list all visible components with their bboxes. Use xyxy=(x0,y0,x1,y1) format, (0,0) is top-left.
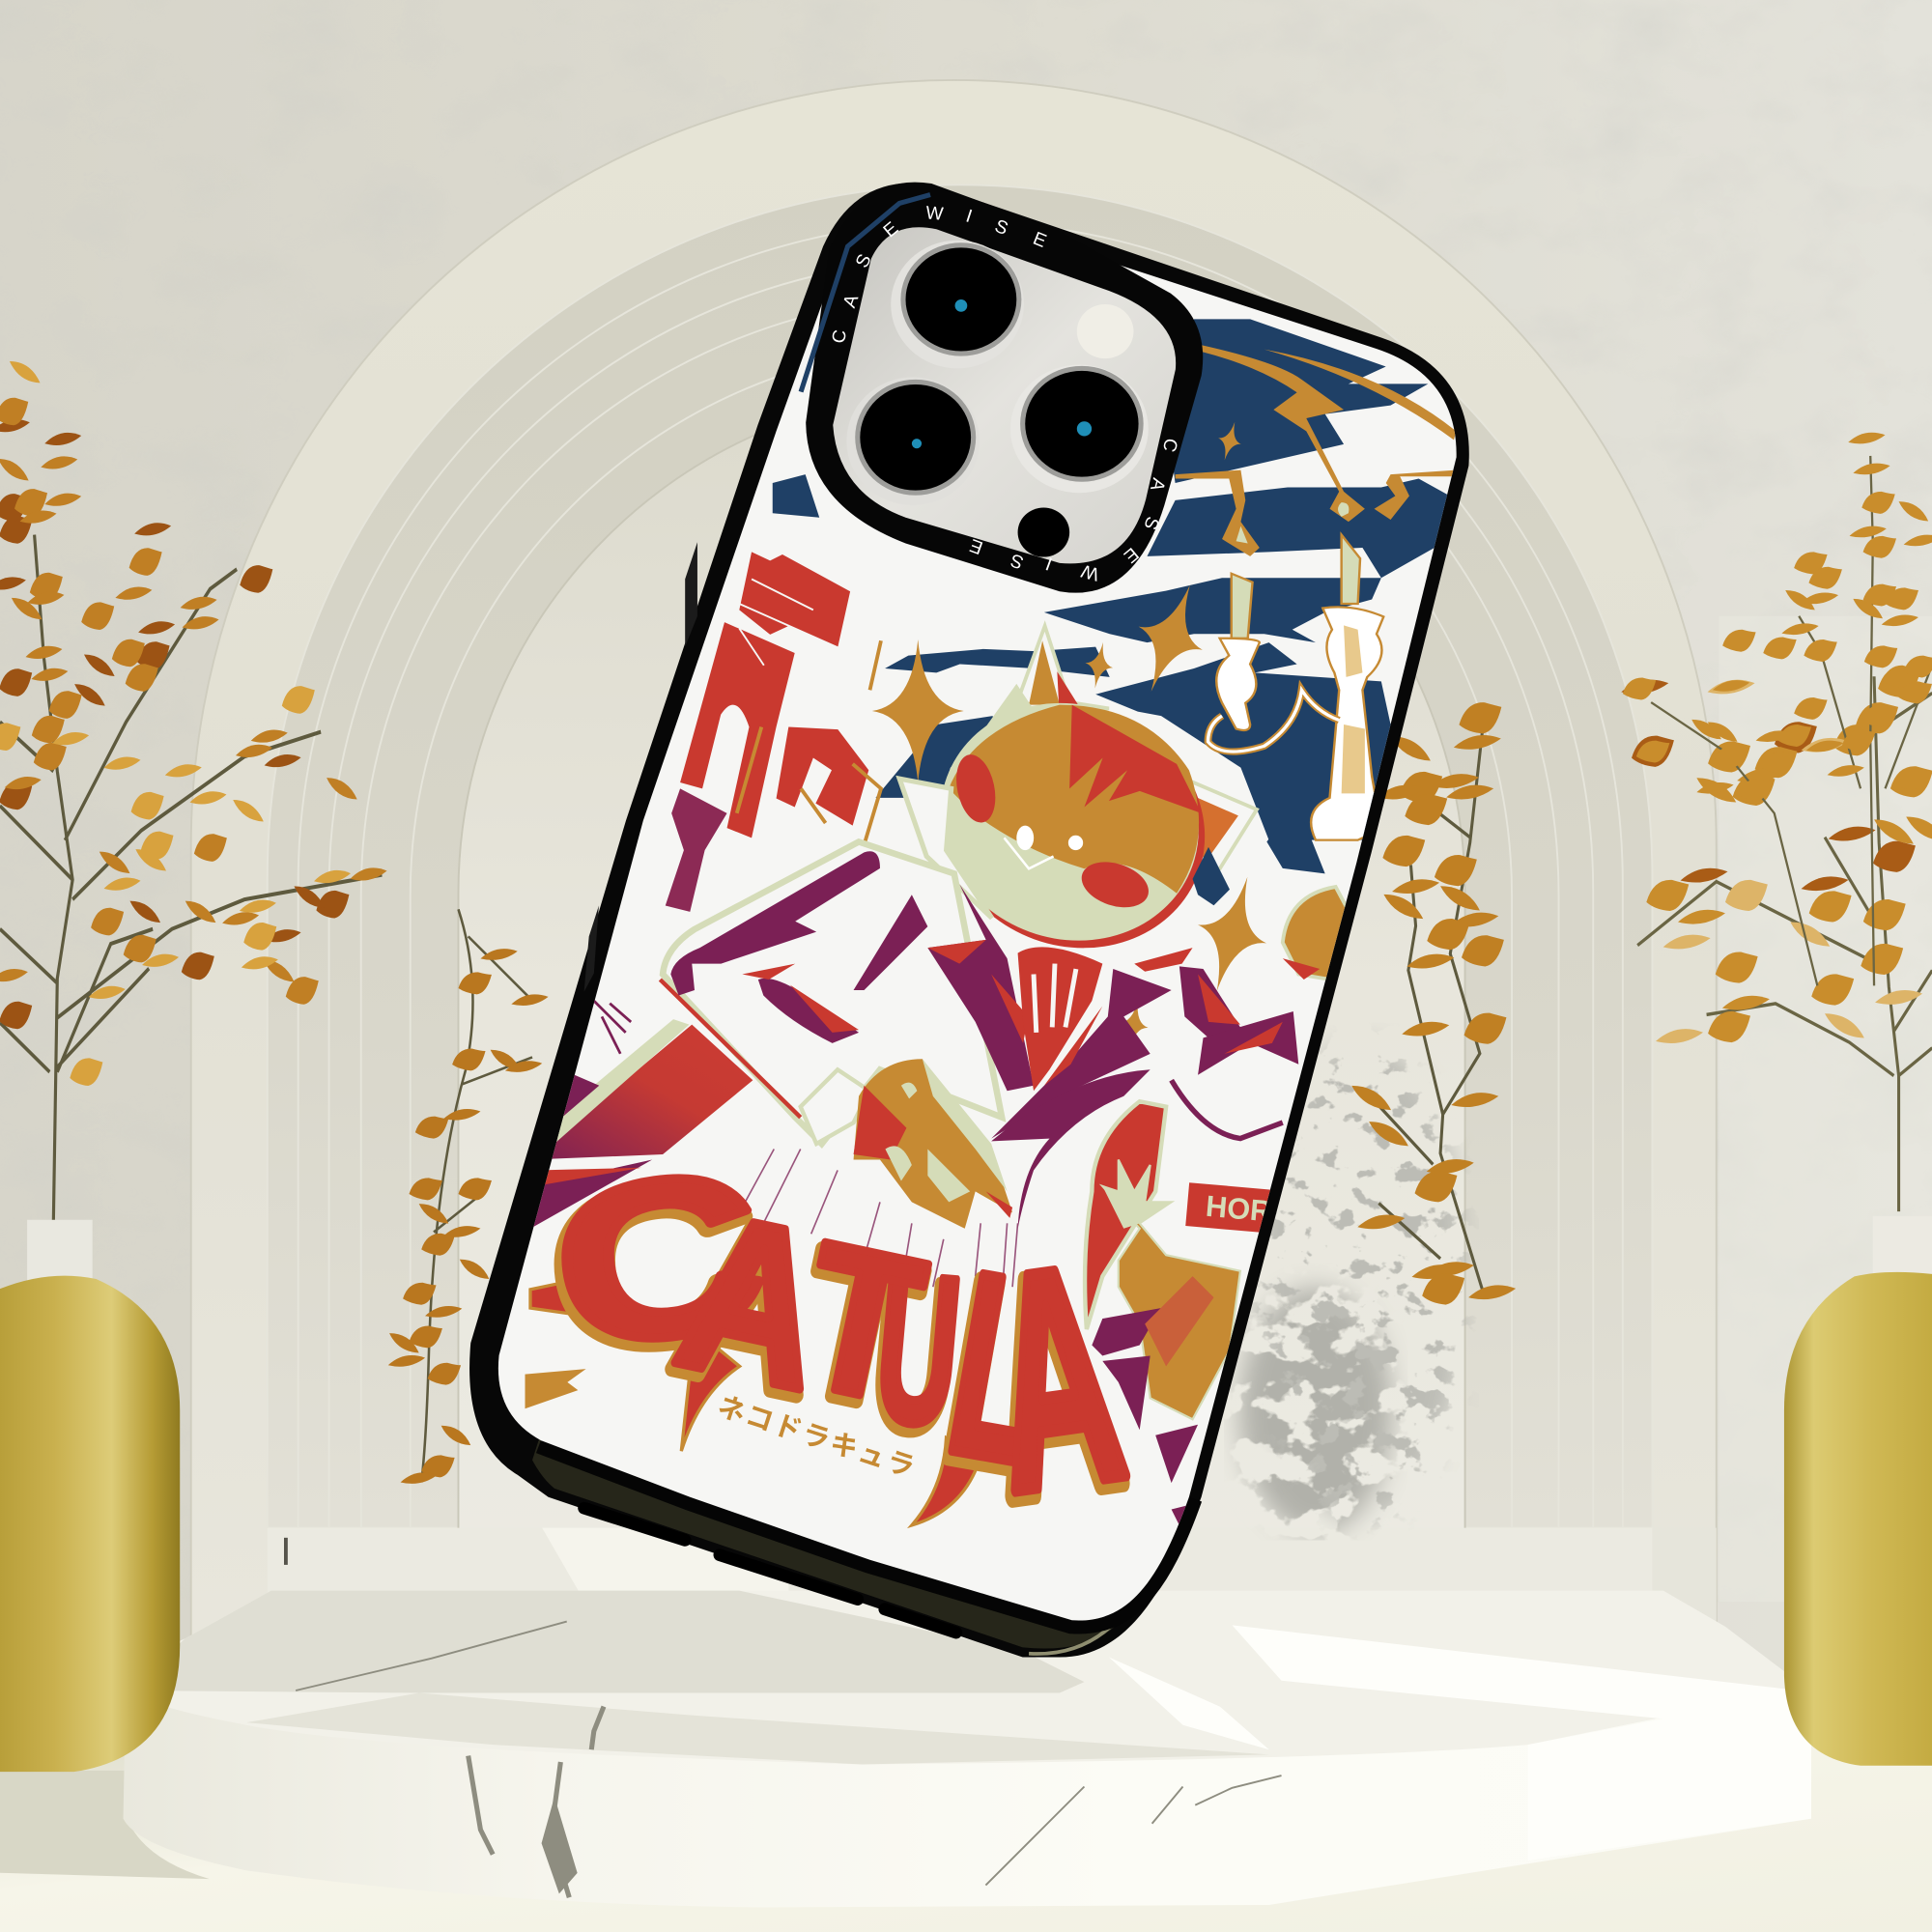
phone case body xyxy=(469,184,1469,1658)
catula logo: L xyxy=(931,1218,1071,1520)
flash xyxy=(1077,304,1133,358)
casewise ring text: E xyxy=(967,534,985,557)
branch: centre right vine xyxy=(1351,702,1516,1305)
collar xyxy=(899,779,992,918)
phone xyxy=(469,173,1491,1663)
catula logo shadow layer: L xyxy=(928,1225,1068,1525)
window shadow on podium xyxy=(246,1693,1269,1765)
sunlight patches xyxy=(1109,1625,1811,1861)
jacket xyxy=(927,884,1034,1091)
catula logo: A xyxy=(972,1200,1141,1556)
black screen rim xyxy=(541,1440,1189,1621)
horror label xyxy=(1185,1182,1316,1236)
castle xyxy=(666,552,881,912)
casewise ring text: E xyxy=(880,218,902,242)
casewise ring text: E xyxy=(1030,229,1049,252)
sleeve xyxy=(663,841,1002,1144)
catula katakana subtitle: ネコドラキュラ xyxy=(714,1391,921,1485)
casewise ring text: A xyxy=(1146,476,1169,494)
casewise ring text: E xyxy=(1120,543,1142,567)
lens bottom xyxy=(846,377,980,505)
right arm xyxy=(1172,1080,1283,1139)
cuff xyxy=(801,1069,869,1144)
casewise ring text xyxy=(829,203,1181,584)
casewise ring text: I xyxy=(963,207,975,227)
gold paint drips xyxy=(1176,345,1456,556)
hand xyxy=(854,1059,1012,1229)
cat head xyxy=(945,620,1260,949)
streaks xyxy=(742,1150,1018,1297)
art strip beside bezel xyxy=(801,195,930,392)
podium top surface xyxy=(127,1591,1806,1765)
gold tail xyxy=(525,1369,586,1408)
catula fangs xyxy=(681,1329,740,1451)
branch: centre left vine xyxy=(388,909,549,1484)
raised fist xyxy=(1283,887,1357,980)
catula logo shadow layer: C xyxy=(536,1128,776,1404)
vase: right gold xyxy=(1784,1216,1932,1766)
horror label: HOR xyxy=(1205,1189,1273,1229)
catula logo: U xyxy=(867,1228,969,1471)
catula logo shadow layer xyxy=(536,1128,1137,1563)
catula logo xyxy=(539,1122,1141,1556)
catula logo: T xyxy=(784,1198,940,1447)
casewise ring text: S xyxy=(992,216,1010,240)
red lining xyxy=(1085,1101,1166,1329)
casewise ring text: W xyxy=(1079,560,1101,584)
marble veining on niche wall xyxy=(1220,1023,1479,1540)
podium front face xyxy=(124,1690,1811,1907)
marble veins on podium xyxy=(296,1622,1282,1897)
charging and speaker ports xyxy=(584,1508,956,1633)
forest xyxy=(1193,820,1325,905)
casewise ring text: S xyxy=(1008,549,1027,572)
phone shadow on podium xyxy=(129,1591,1084,1693)
catula logo shadow layer: U xyxy=(865,1235,965,1478)
branch: right tree lower xyxy=(1621,667,1932,1211)
casewise ring text: S xyxy=(852,251,876,271)
dracula cat suit and cape xyxy=(525,820,1357,1563)
catula logo: A xyxy=(660,1166,846,1436)
casewise ring text: W xyxy=(924,203,944,225)
camera plate xyxy=(833,227,1176,563)
night sky xyxy=(773,319,1465,840)
cape xyxy=(530,1025,753,1160)
marble podium xyxy=(124,1591,1811,1907)
lens top xyxy=(891,241,1024,368)
candelabra xyxy=(1208,535,1383,840)
casewise ring text: S xyxy=(1139,514,1162,532)
lens right xyxy=(1010,365,1149,493)
stepped arch niche xyxy=(191,80,1717,1651)
branch: left tree xyxy=(0,361,387,1220)
stars xyxy=(832,419,1282,1054)
floor xyxy=(0,1725,1932,1932)
camera island xyxy=(801,183,1203,593)
catula logo shadow layer: A xyxy=(657,1172,843,1443)
catula logo shadow layer: A xyxy=(968,1206,1137,1563)
small victim figure xyxy=(1102,1160,1240,1419)
vase: left gold xyxy=(0,1220,180,1772)
lidar sensor xyxy=(1018,508,1069,557)
branch: right tree upper xyxy=(1623,433,1932,985)
phone printed screen xyxy=(498,265,1457,1621)
casewise ring text: I xyxy=(1043,553,1055,574)
casewise ring text: C xyxy=(1158,436,1181,454)
casewise ring text: C xyxy=(829,328,851,345)
casewise ring text: A xyxy=(839,292,863,310)
catula logo shadow layer: T xyxy=(781,1204,937,1454)
catula logo: C xyxy=(539,1122,779,1397)
camera bezel xyxy=(806,183,1203,593)
